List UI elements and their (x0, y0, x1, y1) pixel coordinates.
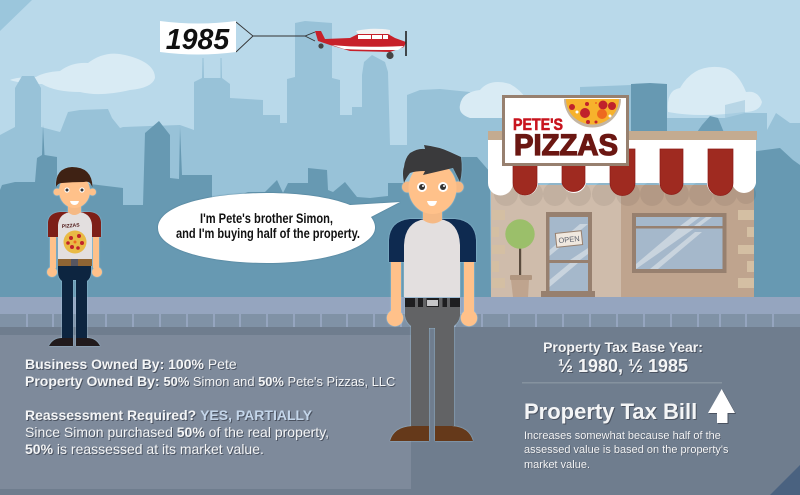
text block: tax bill explanation: Increases somewhat because half of the (524, 430, 721, 442)
shop sign (502, 95, 629, 166)
text block: reassessment: Reassessment Required? YES, PARTIALLY (25, 407, 312, 423)
plane (315, 29, 407, 59)
banner plane (160, 21, 407, 59)
text block: ownership (25, 356, 396, 390)
skyline: far layer (0, 21, 800, 300)
text block: reassessment: Since Simon purchased 50% of the real property, (25, 424, 329, 440)
sidewalk (0, 297, 800, 329)
cloud: right (668, 67, 762, 115)
bubble text: I'm Pete's brother Simon, (200, 211, 333, 226)
sleeves (389, 219, 476, 262)
text block: reassessment: 50% is reassessed at its market value. (25, 441, 264, 457)
shoes (390, 426, 429, 441)
cloud: left (10, 54, 155, 94)
divider (522, 382, 722, 384)
building behind shop (695, 116, 725, 135)
wall bricks (492, 210, 754, 288)
sign text: Pete's: PETE'S (513, 116, 563, 134)
pants (405, 307, 460, 426)
icon: up arrow (708, 389, 735, 423)
banner (160, 21, 236, 54)
head (402, 182, 413, 192)
roof band (488, 131, 757, 140)
text block: ownership: Property Owned By: 50% Simon and 50% Pete's Pizzas, LLC (25, 373, 395, 389)
text block: tax bill explanation (524, 430, 729, 471)
arms (50, 236, 56, 268)
panel: left background (0, 335, 411, 489)
hair (56, 167, 92, 187)
sign pizza (564, 99, 621, 128)
character: Simon (387, 145, 477, 441)
eyes (417, 182, 427, 192)
value: base year: ½ 1980, ½ 1985 (558, 356, 688, 376)
belt (58, 259, 92, 266)
neck (68, 200, 81, 215)
sky background (0, 0, 800, 340)
neck (423, 205, 442, 224)
sleeves (48, 212, 101, 237)
open sign: OPEN (558, 234, 580, 245)
ground (0, 327, 800, 495)
awning shadow (494, 182, 756, 206)
sign text: Pizzas: PIZZAS (514, 129, 618, 162)
shoes (49, 338, 73, 346)
curb bricks (0, 314, 800, 327)
text block: ownership: Business Owned By: 100% Pete (25, 356, 237, 372)
shirt print pizza (64, 230, 86, 254)
awning (488, 140, 756, 196)
hair (403, 145, 462, 183)
smile (427, 201, 437, 206)
pizza shop (488, 95, 757, 297)
potted plant (505, 219, 535, 297)
bottom corner triangle (770, 465, 800, 495)
arms (391, 260, 401, 312)
belt (405, 298, 460, 307)
translucent building over cloud (725, 100, 745, 140)
building: right of shop (750, 148, 800, 300)
smile (70, 201, 79, 205)
head (54, 188, 60, 196)
banner year: 1985 (166, 24, 230, 56)
shirt print text: PIZZAS (62, 222, 81, 230)
door (541, 212, 595, 297)
shirt (404, 219, 460, 297)
eyes (64, 187, 70, 193)
shop window (632, 213, 726, 273)
text block: reassessment (25, 407, 329, 457)
character: Pete (47, 167, 102, 346)
text block: tax bill explanation: assessed value is based on the property's (524, 444, 728, 456)
pants (58, 266, 91, 338)
tow lines (236, 22, 315, 52)
skyline: near layer (0, 121, 491, 300)
corner triangle (0, 0, 32, 31)
cloud: middle (460, 82, 532, 118)
heading: base year: Property Tax Base Year: (543, 339, 703, 355)
heading: property tax bill: Property Tax Bill (524, 399, 697, 424)
text block: tax bill explanation: market value. (524, 459, 590, 471)
shop walls (491, 185, 621, 297)
tower behind shop (631, 83, 667, 140)
speech bubble (158, 193, 400, 263)
speech bubble: and I'm buying half of the property. (176, 226, 360, 241)
shirt (58, 212, 92, 259)
